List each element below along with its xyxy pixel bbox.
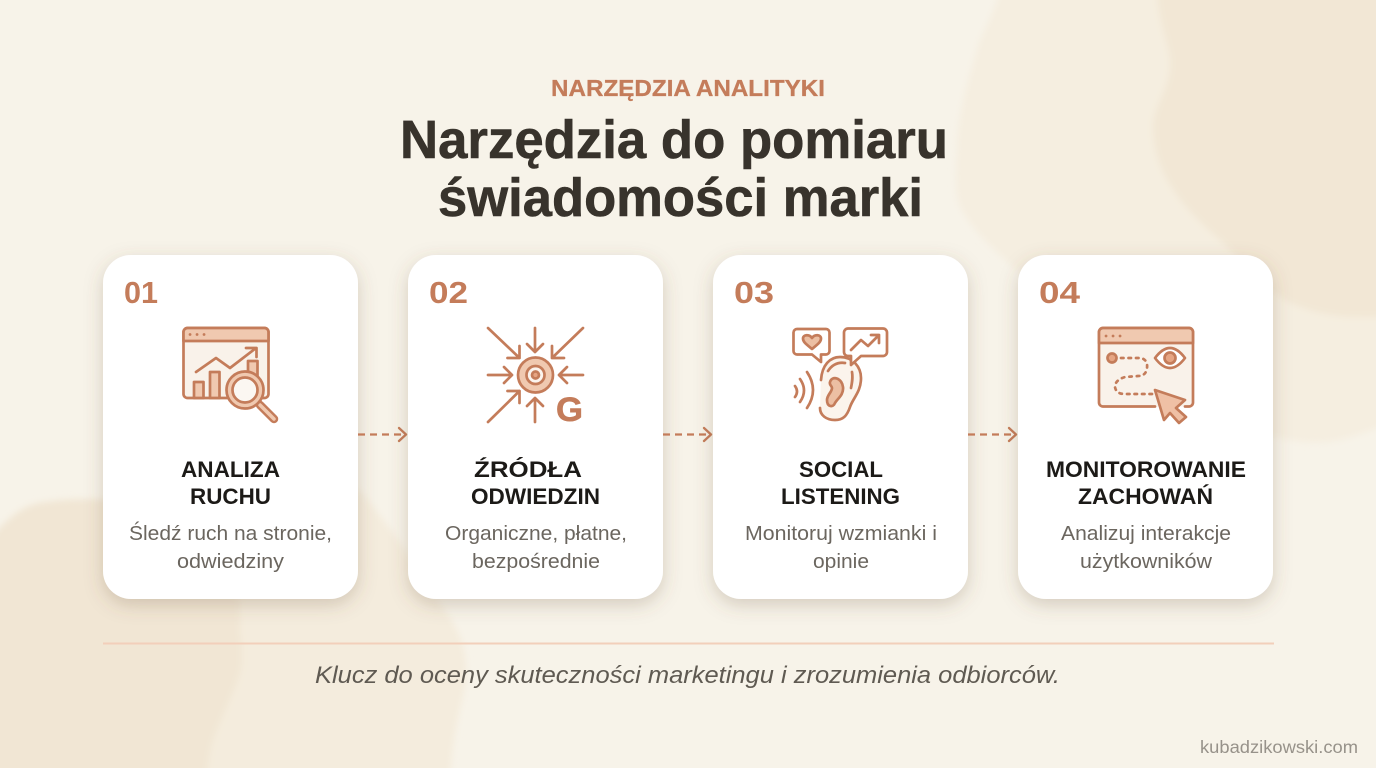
icon: browser window with eye and cursor <box>1099 328 1193 423</box>
arrow 2 to 3 <box>663 433 711 436</box>
icon: arrows into target with G <box>488 328 583 422</box>
card title: ANALIZA <box>181 457 280 482</box>
panel: card 01: odwiedziny <box>177 550 285 573</box>
number 03: 03 <box>734 275 774 310</box>
panel: card 04 <box>1018 255 1273 599</box>
card description: Monitoruj wzmianki i <box>745 522 937 545</box>
arrow 3 to 4 <box>968 433 1016 436</box>
title <box>400 110 948 228</box>
panel: card 03 <box>713 255 968 599</box>
card title: ŹRÓDŁA <box>474 457 582 482</box>
panel: card 01: RUCHU <box>190 484 271 509</box>
panel: card 03: LISTENING <box>781 484 900 509</box>
title: świadomości marki <box>438 168 923 228</box>
panel: card 01 <box>103 255 358 599</box>
footer summary: Klucz do oceny skuteczności marketingu i zrozumienia odbiorców. <box>315 662 1060 689</box>
card title: SOCIAL <box>799 457 883 482</box>
icon letter G: G <box>556 391 583 429</box>
icon: ear with speech bubbles <box>794 328 887 420</box>
title: Narzędzia do pomiaru <box>400 110 948 170</box>
card description: Organiczne, płatne, <box>445 522 627 545</box>
panel: card 02: ODWIEDZIN <box>471 484 600 509</box>
arrow 1 to 2 <box>358 433 406 436</box>
panel: card 03: opinie <box>813 550 869 573</box>
number 01: 01 <box>124 275 158 310</box>
panel: card 04: użytkowników <box>1080 550 1212 573</box>
card title: MONITOROWANIE <box>1046 457 1246 482</box>
watermark: kubadzikowski.com <box>1200 737 1358 757</box>
panel: card 04: ZACHOWAŃ <box>1078 484 1213 509</box>
panel: card 02 <box>408 255 663 599</box>
eyebrow heading: NARZĘDZIA ANALITYKI <box>551 75 825 101</box>
card description: Analizuj interakcje <box>1061 522 1231 545</box>
card description: Śledź ruch na stronie, <box>129 521 332 545</box>
number 04: 04 <box>1039 275 1081 310</box>
panel: card 02: bezpośrednie <box>472 550 600 573</box>
icon: analytics window with magnifier <box>184 328 274 419</box>
number 02: 02 <box>429 275 468 310</box>
